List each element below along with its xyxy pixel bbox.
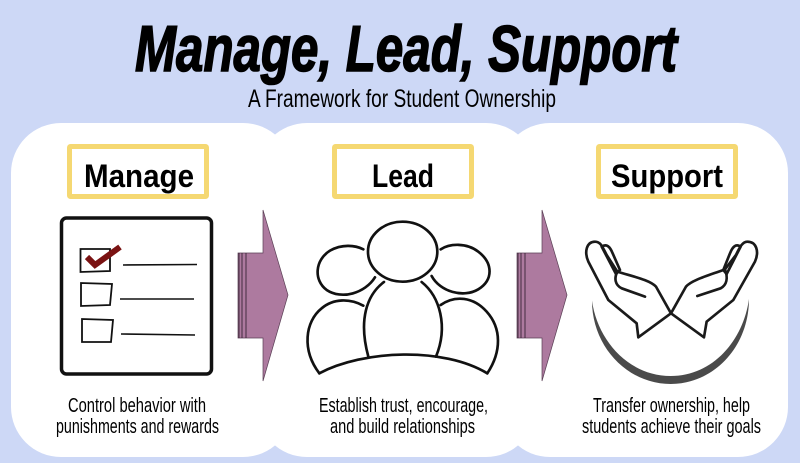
icon: supporting hands [586,242,757,384]
panel: lead background [257,123,536,457]
caption: manage [56,395,219,438]
heading: Manage: Manage [84,158,194,194]
caption: support [582,395,761,438]
caption: manage: Control behavior with [68,395,206,417]
icon: checklist [62,218,212,374]
panel: manage background [11,123,293,457]
heading: Lead [334,146,472,196]
caption: lead [319,395,488,438]
panel: support background [500,123,788,457]
arrow: lead to support [517,210,567,381]
caption: manage: punishments and rewards [56,416,219,438]
caption: lead: Establish trust, encourage, [319,395,488,417]
heading: Manage [70,146,206,196]
heading: Lead: Lead [372,158,434,194]
caption: lead: and build relationships [330,416,475,438]
arrow: manage to lead [238,210,288,381]
heading: Support [598,146,736,196]
subtitle: A Framework for Student Ownership [248,85,556,113]
heading: Support: Support [611,158,723,194]
icon: group of people [308,222,498,373]
